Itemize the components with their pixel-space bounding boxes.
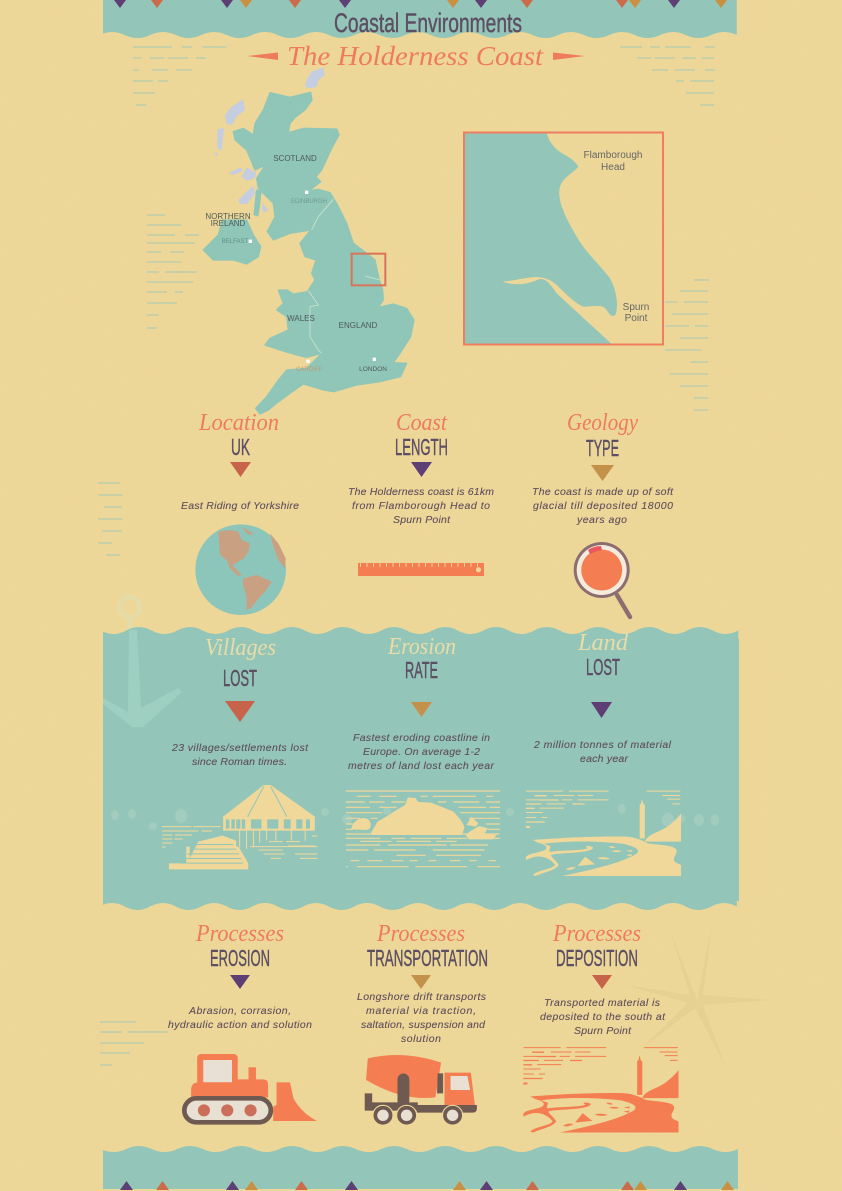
decoration: water dashes bbox=[98, 47, 715, 1065]
panel: erosion process: EROSION bbox=[210, 945, 270, 971]
panel: location: UK bbox=[231, 434, 250, 460]
map labels: IRELAND bbox=[211, 219, 246, 228]
icon: pier hut bbox=[162, 785, 317, 869]
panel: coast length: Spurn Point bbox=[393, 514, 451, 526]
panel: transportation process: Longshore drift transports bbox=[357, 991, 487, 1003]
panel: top banner bbox=[99, 0, 737, 38]
panel: villages lost bbox=[162, 635, 317, 869]
panel: villages lost: Villages bbox=[205, 635, 276, 661]
subtitle: The Holderness Coast bbox=[287, 41, 545, 71]
inset labels bbox=[584, 150, 649, 324]
map labels: WALES bbox=[287, 314, 315, 323]
icon: globe bbox=[195, 524, 286, 615]
panel: deposition process: DEPOSITION bbox=[556, 945, 638, 971]
panel: transportation process: material via traction, bbox=[366, 1005, 476, 1017]
title: Coastal Environments bbox=[334, 8, 522, 38]
panel: location bbox=[181, 410, 299, 615]
Northern Ireland bbox=[203, 220, 261, 264]
map labels: SCOTLAND bbox=[273, 154, 317, 163]
panel: erosion rate bbox=[346, 634, 500, 867]
panel: transportation process bbox=[357, 921, 488, 1125]
panel: geology type bbox=[532, 410, 674, 617]
panel: villages lost: LOST bbox=[223, 665, 257, 691]
inset labels: Flamborough bbox=[584, 150, 642, 161]
selection box bbox=[352, 254, 385, 285]
panel: land lost: LOST bbox=[586, 654, 620, 680]
panel: deposition process: Processes bbox=[552, 921, 641, 947]
panel: erosion rate: RATE bbox=[405, 657, 438, 683]
panel: transportation process: TRANSPORTATION bbox=[367, 945, 488, 971]
panel: erosion process bbox=[168, 921, 317, 1122]
panel: deposition process: deposited to the south at bbox=[540, 1011, 666, 1023]
map labels bbox=[205, 154, 387, 373]
icon: lighthouse shore bbox=[526, 791, 681, 876]
decoration: bubbles bbox=[111, 804, 719, 830]
panel: geology type: years ago bbox=[576, 514, 627, 526]
panel: geology type: TYPE bbox=[586, 435, 619, 461]
panel: coast length bbox=[348, 410, 494, 576]
panel: transportation process: Processes bbox=[376, 921, 465, 947]
panel: deposition process: Spurn Point bbox=[574, 1025, 632, 1037]
decoration: compass rose bbox=[625, 925, 770, 1065]
panel: bottom banner bbox=[101, 1146, 738, 1190]
inset labels: Head bbox=[601, 162, 625, 173]
panel: erosion rate: Erosion bbox=[387, 634, 456, 660]
icon: lighthouse shore, orange bbox=[523, 1047, 679, 1132]
panel: erosion process: hydraulic action and solution bbox=[168, 1019, 312, 1031]
panel: land lost: 2 million tonnes of material bbox=[533, 739, 672, 751]
Great Britain bbox=[233, 92, 414, 414]
panel: coast length: Coast bbox=[396, 410, 448, 436]
islands bbox=[214, 67, 325, 213]
panel: villages lost: since Roman times. bbox=[192, 756, 287, 768]
panel: location: Location bbox=[198, 410, 279, 436]
bunting triangles, top bbox=[114, 0, 727, 8]
panel: coast length: from Flamborough Head to bbox=[352, 500, 490, 512]
icon: island bbox=[346, 791, 500, 867]
map labels: ENGLAND bbox=[339, 321, 378, 330]
inset map: Holderness bbox=[464, 132, 663, 344]
panel: geology type: The coast is made up of soft bbox=[532, 486, 674, 498]
map labels: BELFAST bbox=[222, 239, 249, 245]
panel: coast length: The Holderness coast is 61km bbox=[348, 486, 494, 498]
panel: land lost: Land bbox=[577, 630, 629, 656]
panel: geology type: Geology bbox=[567, 410, 638, 436]
borders bbox=[308, 199, 380, 353]
panel: geology type: glacial till deposited 18000 bbox=[533, 500, 673, 512]
panel: location: East Riding of Yorkshire bbox=[181, 500, 299, 512]
map labels: LONDON bbox=[359, 366, 387, 373]
panel: villages lost: 23 villages/settlements lost bbox=[171, 742, 309, 754]
panel: erosion process: Abrasion, corrasion, bbox=[188, 1005, 291, 1017]
decoration: anchor on teal bbox=[103, 630, 182, 727]
panel: transportation process: saltation, suspension and bbox=[361, 1019, 486, 1031]
decoration: anchor ring bbox=[120, 597, 140, 630]
inset labels: Spurn bbox=[623, 302, 649, 313]
panel: land lost: each year bbox=[580, 753, 628, 765]
panel: deposition process bbox=[523, 921, 679, 1132]
UK map bbox=[203, 67, 414, 414]
panel: middle teal band bbox=[99, 627, 739, 910]
map labels: NORTHERN bbox=[205, 212, 251, 221]
icon: magnifying glass bbox=[574, 542, 630, 617]
map labels: EDINBURGH bbox=[291, 199, 327, 205]
bunting triangles, bottom bbox=[120, 1181, 734, 1190]
panel: erosion rate: metres of land lost each year bbox=[348, 760, 494, 772]
panel: coast length: LENGTH bbox=[395, 434, 448, 460]
icon: cement mixer truck bbox=[365, 1055, 477, 1125]
panel: transportation process: solution bbox=[401, 1033, 441, 1045]
panel: erosion rate: Europe. On average 1-2 bbox=[363, 746, 480, 758]
map labels: CARDIFF bbox=[296, 367, 322, 373]
panel: erosion process: Processes bbox=[195, 921, 284, 947]
city markers bbox=[249, 191, 376, 363]
inset labels: Point bbox=[625, 313, 648, 324]
panel: deposition process: Transported material is bbox=[544, 997, 661, 1009]
icon: ruler bbox=[358, 563, 484, 576]
panel: land lost bbox=[526, 630, 681, 876]
icon: bulldozer bbox=[184, 1054, 317, 1122]
panel: erosion rate: Fastest eroding coastline in bbox=[353, 732, 490, 744]
